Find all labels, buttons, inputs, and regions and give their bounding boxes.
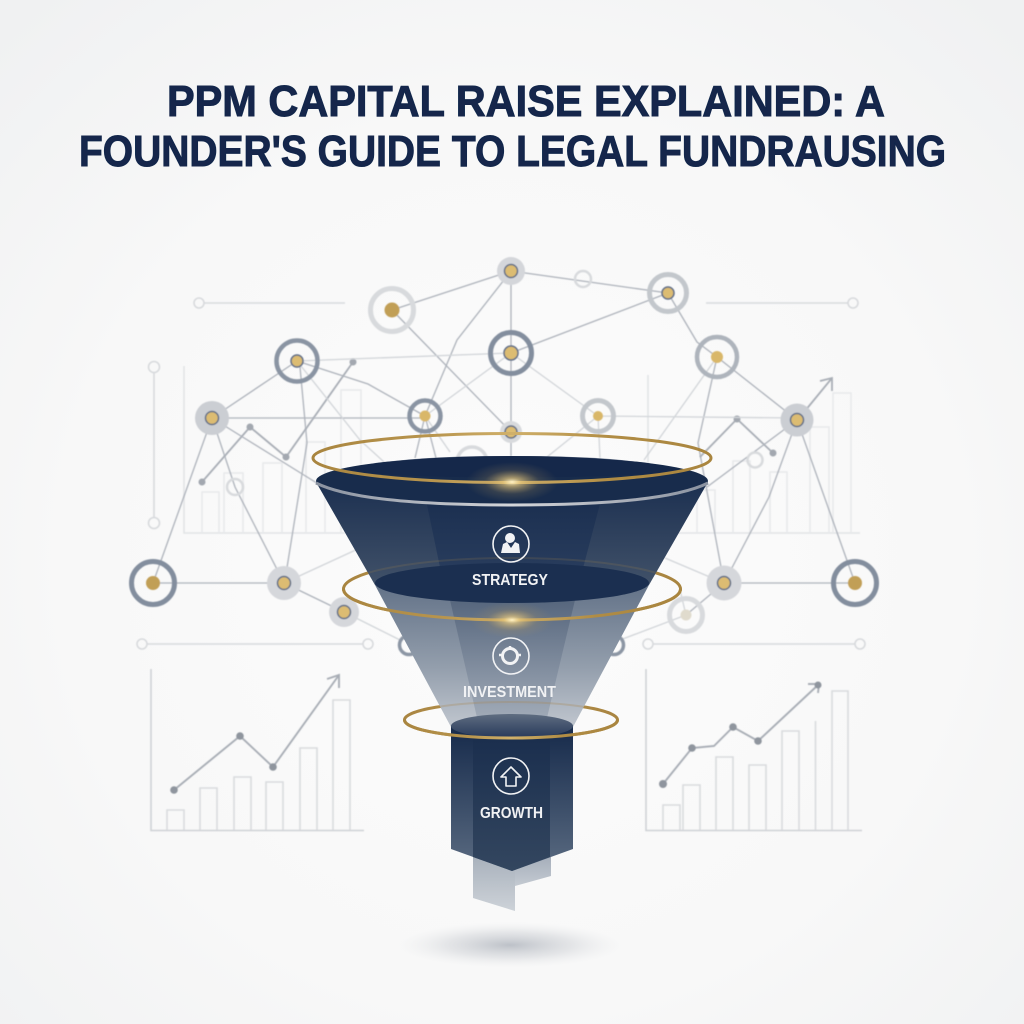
funnel middle disc [375, 563, 649, 603]
background chart: upper right [648, 375, 860, 533]
gold ring: middle front [344, 558, 680, 638]
funnel upper section [316, 456, 708, 585]
icon: investment gear [493, 638, 529, 674]
node: halo nodes [195, 257, 814, 627]
chart: lower left growth [151, 669, 364, 830]
ground shadow [395, 922, 625, 968]
background chart: upper left [184, 358, 361, 533]
decorative connector lines [137, 298, 865, 649]
funnel lower section [375, 585, 649, 727]
title: PPM CAPITAL RAISE EXPLAINED: A [167, 77, 885, 126]
network of connected nodes [132, 257, 876, 654]
node: ring nodes [132, 274, 876, 632]
funnel stem [451, 714, 573, 871]
label: strategy: STRATEGY [472, 572, 548, 589]
funnel tail [473, 850, 551, 911]
small hollow rings [227, 271, 762, 495]
network lines [153, 271, 855, 615]
label: growth: GROWTH [480, 805, 543, 822]
chart: lower right growth [646, 669, 862, 830]
rear arcs of lower gold rings [344, 558, 680, 738]
gold ring: lower front [404, 702, 618, 738]
icon: growth house arrow [493, 758, 529, 794]
label: investment: INVESTMENT [463, 684, 556, 701]
gold ring: top [313, 434, 711, 502]
icon: strategy person [493, 526, 529, 562]
title [79, 77, 946, 176]
funnel [316, 456, 708, 911]
